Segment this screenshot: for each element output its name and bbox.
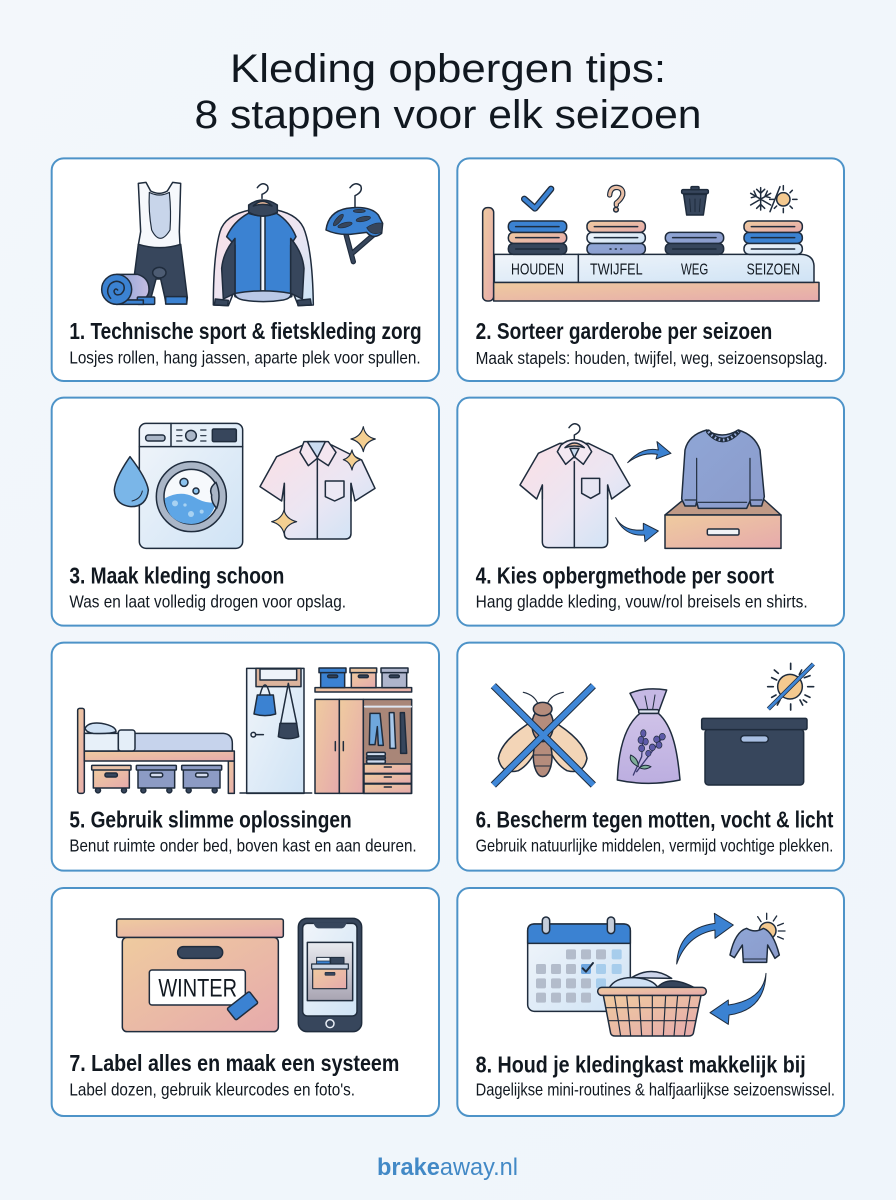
- title: [194, 47, 702, 137]
- bin labels: SEIZOEN: [747, 261, 800, 278]
- card background: [52, 888, 439, 1116]
- tape: [227, 991, 258, 1020]
- panel: step 6: [457, 643, 844, 871]
- arrow: down to basket: [710, 973, 766, 1024]
- bin labels: WEG: [681, 261, 708, 278]
- icon: storage box: [702, 718, 807, 785]
- icon: water drop: [114, 457, 148, 507]
- storage box 3: [182, 765, 222, 793]
- card background: [52, 158, 439, 381]
- icon: wardrobe: [315, 699, 412, 793]
- icon: drawer: [665, 499, 781, 548]
- description: Label dozen, gebruik kleurcodes en foto's.: [69, 1080, 355, 1100]
- icon: bed with storage boxes: [78, 708, 234, 793]
- icon: calendar: [528, 917, 630, 1011]
- icon: labelled box: [117, 919, 283, 1032]
- icon: shirt on hanger: [520, 424, 630, 548]
- card background: [457, 888, 844, 1116]
- arrow: up to sweater: [677, 913, 733, 964]
- card background: [52, 398, 439, 626]
- bin labels: TWIJFEL: [590, 261, 643, 278]
- description: Maak stapels: houden, twijfel, weg, seizoensopslag.: [476, 348, 828, 368]
- icon: phone with photo: [298, 918, 362, 1032]
- panel: step 8: [457, 888, 844, 1116]
- storage box 1: [92, 765, 131, 793]
- title: 8 stappen voor elk seizoen: [194, 93, 702, 137]
- icon: trash can: [682, 187, 708, 215]
- icon: sparkles: [272, 427, 375, 533]
- panel: step 3: [52, 398, 439, 626]
- label text: WINTER: [158, 975, 237, 1003]
- panel: step 1: [52, 158, 439, 381]
- description: Was en laat volledig drogen voor opslag.: [69, 591, 346, 611]
- heading: 5. Gebruik slimme oplossingen: [69, 806, 352, 832]
- icon: cycling bib shorts and roll: [102, 182, 187, 304]
- card background: [457, 643, 844, 871]
- panel: step 5: [52, 643, 439, 871]
- icon: snowflake and sun: [751, 186, 797, 213]
- icon: washing machine: [139, 423, 243, 548]
- stack: houden: [508, 221, 567, 254]
- panel: step 7: [52, 888, 439, 1116]
- heading: 3. Maak kleding schoon: [69, 562, 284, 588]
- icon: crossed-out sun: [768, 663, 814, 710]
- stack: twijfel: [587, 221, 645, 254]
- footer brand: brakeaway.nl: [377, 1154, 518, 1181]
- storage box 2: [136, 765, 176, 793]
- heading: 4. Kies opbergmethode per soort: [476, 562, 774, 588]
- heading: 7. Label alles en maak een systeem: [69, 1050, 399, 1076]
- calendar day grid: [536, 949, 622, 1003]
- arrow to drawer: [616, 518, 658, 542]
- icon: question mark: [610, 187, 623, 212]
- icon: laundry basket: [598, 971, 706, 1036]
- icon: crossed-out moth: [493, 686, 593, 785]
- stack: weg: [665, 232, 724, 254]
- icon: cycling jacket on hanger: [213, 184, 313, 306]
- illustration: bed with sorted stacks: [483, 186, 819, 301]
- heading: 1. Technische sport & fietskleding zorg: [69, 318, 422, 344]
- heading: 2. Sorteer garderobe per seizoen: [476, 318, 772, 344]
- bin labels: HOUDEN: [511, 261, 564, 278]
- icon: overhead boxes: [315, 668, 412, 692]
- card background: [457, 398, 844, 626]
- panel: step 4: [457, 398, 844, 626]
- panel: step 2: [457, 158, 844, 381]
- icon: sweater with sun: [730, 913, 785, 962]
- icon: lavender sachet: [617, 689, 680, 783]
- arrow to sweater: [628, 442, 671, 463]
- icon: check: [524, 189, 551, 208]
- description: Hang gladde kleding, vouw/rol breisels en shirts.: [476, 591, 808, 611]
- heading: 8. Houd je kledingkast makkelijk bij: [476, 1051, 806, 1077]
- bin labels: [511, 261, 800, 278]
- card background: [457, 158, 844, 381]
- description: Benut ruimte onder bed, boven kast en aan deuren.: [69, 836, 417, 856]
- icon: bike helmet on hook: [326, 184, 383, 262]
- title: Kleding opbergen tips:: [230, 47, 666, 91]
- icon: clean shirt: [260, 442, 375, 539]
- icon: sweater: [682, 430, 764, 508]
- icon: door with bags: [240, 668, 312, 793]
- description: Losjes rollen, hang jassen, aparte plek voor spullen.: [69, 347, 421, 367]
- stack: seizoen: [744, 221, 802, 254]
- card background: [52, 643, 439, 871]
